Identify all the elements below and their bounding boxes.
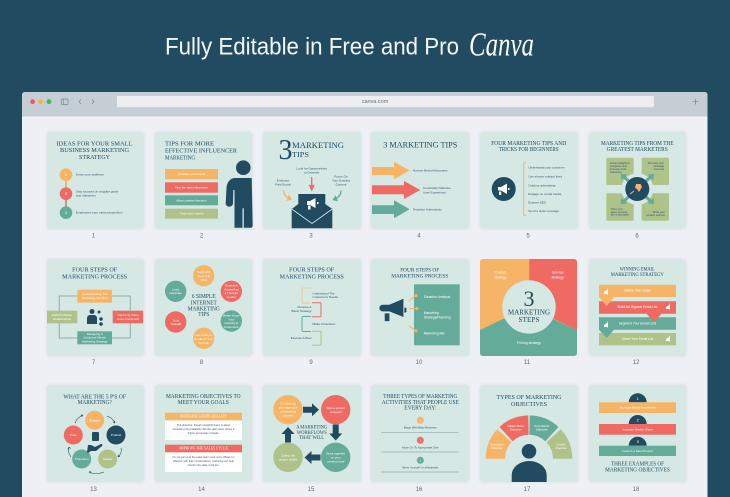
ribbons: Clean Your Email List <box>622 337 653 341</box>
tip labels: Your Existing <box>332 179 350 183</box>
tip labels: Focus On <box>334 175 348 179</box>
panel: template 8: 8 <box>200 360 204 366</box>
tip circles: Leader <box>227 295 236 299</box>
center circle: MARKETING <box>508 308 551 316</box>
bracket <box>524 162 526 216</box>
ribbons <box>599 285 676 345</box>
title: TRICKS FOR BEGINNERS <box>499 147 559 153</box>
title <box>391 267 448 280</box>
arc segments: Growth <box>556 442 566 446</box>
title: WORKFLOWS <box>297 430 327 436</box>
workflow circles: process <box>283 414 294 418</box>
step boxes: Marketing-mix (4C) <box>82 296 107 300</box>
title: MARKETING PROCESS <box>280 275 344 281</box>
workflow circles: Sign a project <box>327 406 345 410</box>
tip labels: User Experience <box>423 190 446 194</box>
title <box>166 394 241 406</box>
step boxes: Relationships <box>53 317 72 321</box>
title: 6 SIMPLE <box>192 294 216 300</box>
red wedge <box>529 259 577 330</box>
title <box>278 135 344 166</box>
panel: template 18 <box>589 385 686 493</box>
goal card two: It's not just up to the sales team to be more efficient or <box>172 455 235 459</box>
title: MEET YOUR GOALS <box>178 400 229 406</box>
title: 3 <box>278 135 292 166</box>
goal card two <box>165 445 242 472</box>
title <box>601 141 674 153</box>
step labels: Understand The <box>312 292 335 296</box>
panel: template 14: 14 <box>198 487 205 493</box>
step boxes: Marketing Strategy <box>82 339 108 343</box>
numbered steps: Know your audience <box>76 173 104 177</box>
arc segments: Objective <box>536 428 548 432</box>
tip circles: Generate <box>169 291 182 295</box>
wedge labels: Service <box>552 271 564 275</box>
icon: envelope with megaphone <box>292 194 332 228</box>
panel: template 1: 1 <box>92 234 96 240</box>
box text: message <box>653 165 665 168</box>
green panel: Situation Analysis <box>424 295 451 299</box>
panel: template 12 <box>589 259 686 366</box>
tip circles <box>165 265 242 349</box>
arrow: green <box>372 200 410 218</box>
workflow circles <box>273 395 350 472</box>
tip labels: Nurture Brand Advocates <box>413 169 448 173</box>
box text: Write your <box>653 210 665 214</box>
numbered steps: Stay focused on singular goals <box>76 190 119 194</box>
five P circles: People <box>103 457 113 461</box>
tips list: Understand your customer <box>528 166 565 170</box>
goal card one: INCREASE LEADS QUALITY <box>180 414 227 418</box>
tips list <box>528 166 565 213</box>
tip circles: Mind <box>200 278 207 282</box>
goal card one: The objective, though straightforward, is about <box>177 423 230 427</box>
center circle <box>502 280 556 334</box>
icon: marketer with gears <box>87 309 103 326</box>
title: INTERNET <box>191 300 217 306</box>
step boxes: Build Profitable <box>52 313 72 317</box>
stacked bars: 1 <box>637 396 640 401</box>
step boxes <box>47 290 143 344</box>
workflow circles: onboarding <box>280 410 296 414</box>
green panel: Strategy/Planning <box>424 316 451 320</box>
center circle: 3 <box>524 286 534 311</box>
panel: template 17 <box>480 385 578 493</box>
ribbons: Define Your Goals <box>624 289 651 293</box>
stacked bars: Launch a New Product <box>623 449 653 453</box>
title <box>63 394 127 406</box>
wedge labels: strategy <box>551 276 564 280</box>
cycle arrows <box>68 415 121 474</box>
arrows <box>284 177 341 200</box>
goal card two: shorten the sales cycle too. <box>188 463 219 467</box>
title <box>296 425 327 441</box>
tip circles: Website <box>198 341 209 345</box>
five P circles: Position <box>89 418 100 422</box>
title: TIPS <box>198 312 209 318</box>
step boxes: From Customers <box>117 317 140 321</box>
numbered steps <box>60 168 123 219</box>
title: MARKETING? <box>78 400 112 406</box>
panel: template 10 <box>371 259 469 366</box>
title <box>188 294 220 318</box>
panel: template 7: 7 <box>92 360 96 366</box>
tip circles: Guide on Your <box>194 337 213 341</box>
activity list: Move Yourself On Wholesale <box>402 466 439 470</box>
title: THREE TYPES OF MARKETING <box>383 394 458 400</box>
five P circles: Promotion <box>75 457 89 461</box>
step labels: Customer's Needs <box>312 295 338 299</box>
title <box>62 268 127 281</box>
title: EFFECTIVE INFLUENCER <box>165 148 237 154</box>
title: FOUR STEPS OF <box>400 267 439 273</box>
box text: promote word- <box>610 167 627 171</box>
panel: template 2: 2 <box>200 234 204 240</box>
icon: person <box>512 444 547 482</box>
title: MARKETING PROCESS <box>62 275 127 281</box>
wedge labels: strategy <box>494 276 507 280</box>
numbered steps: and objectives <box>76 194 96 198</box>
heading: Fully Editable in Free and Pro Canva: Fully Editable in Free and Pro <box>165 34 459 60</box>
tip labels: Content <box>336 183 347 187</box>
address bar <box>117 96 654 107</box>
panel: template 12: 12 <box>633 360 640 366</box>
activity list: 1 <box>419 418 421 422</box>
tip circles: Lead <box>172 288 179 292</box>
tip boxes <box>606 158 669 221</box>
tip circles: Better Know <box>223 314 240 318</box>
panel: template 11 <box>480 259 577 366</box>
title: MARKETING OBJECTIVES <box>605 468 670 474</box>
title: OBJECTIVES <box>511 401 547 408</box>
panel: template 15 <box>263 385 361 493</box>
title: A MARKETING <box>296 425 327 431</box>
step boxes: Designing A <box>87 332 103 336</box>
tips list: Outdoor advertising <box>528 183 556 187</box>
tip labels: to Diversify <box>304 171 320 175</box>
box text: Train your <box>611 207 623 211</box>
tip labels: Embrace <box>277 179 289 183</box>
title: WINNING EMAIL <box>620 268 655 272</box>
tips list: Use shorter subject lines <box>528 175 563 179</box>
tip labels: Paid Social <box>275 182 291 186</box>
tip labels <box>413 169 451 212</box>
tip labels: Prioritise Authenticity <box>413 208 442 212</box>
step labels <box>291 292 338 340</box>
tip circles: Industry & <box>225 321 238 325</box>
list bars: Track your metrics <box>179 212 204 216</box>
icon: megaphone circle <box>492 177 516 201</box>
box text: Create delighted <box>610 161 630 165</box>
wedge labels: Product <box>494 271 506 275</box>
box text <box>610 161 665 217</box>
panel: template 16 <box>371 385 469 493</box>
title: 3 MARKETING TIPS <box>383 140 457 150</box>
panel: template 14 <box>155 385 252 493</box>
title: THREE EXAMPLES OF <box>611 461 665 467</box>
stacked bars: Increase Market Share <box>623 427 653 431</box>
numbered steps: 1 <box>65 172 68 177</box>
panel: template 13 <box>47 385 144 493</box>
panel: template 13: 13 <box>90 487 97 493</box>
panel: template 5 <box>480 132 578 240</box>
panel: template 11: 11 <box>524 360 531 366</box>
panel: template 18: 18 <box>633 487 640 493</box>
workflow circles: your agency's <box>279 406 298 410</box>
title: BUSINESS MARKETING <box>60 148 130 154</box>
green panel: Marketing Mix <box>424 332 445 336</box>
tip circles: the end in <box>197 274 211 278</box>
green panel <box>414 284 460 345</box>
title: TYPES OF MARKETING <box>496 394 562 401</box>
panel: template 1 <box>47 132 144 240</box>
tip circles: Get to Know <box>195 333 213 337</box>
arc segments: Evaluation <box>490 442 504 446</box>
panel: template 7 <box>47 259 144 366</box>
center icon <box>625 177 649 201</box>
step labels: Make A Decision <box>312 322 336 326</box>
box text: marketing <box>610 170 622 174</box>
panel: template 17: 17 <box>524 487 531 493</box>
stepped connector <box>302 288 321 345</box>
title: MARKETING TIPS FROM THE <box>601 141 674 147</box>
workflow circles: proposal <box>330 410 342 414</box>
title: MARKETING PROCESS <box>391 274 448 280</box>
step boxes: Capturing Value <box>117 313 139 317</box>
panel: template 6 <box>589 132 686 240</box>
step labels: Execute A Plan <box>291 336 312 340</box>
panel: template 3 <box>263 132 361 240</box>
goal card one: increasing the probability that the sales team closes a <box>173 427 235 431</box>
arrows <box>621 174 654 204</box>
activity list <box>381 417 459 472</box>
panel: template 10: 10 <box>416 360 423 366</box>
box text: like a specialist <box>611 212 629 216</box>
title: IDEAS FOR YOUR SMALL <box>56 142 133 148</box>
title: WHAT ARE THE 5 P'S OF <box>63 394 127 400</box>
browser window <box>22 92 708 497</box>
title: FOUR STEPS OF <box>72 268 118 274</box>
title: THAT WILL <box>299 435 325 441</box>
activity list: Begin With Baby Business <box>404 426 437 430</box>
workflow circles: Work together <box>326 452 345 456</box>
panel: template 16: 16 <box>416 487 423 493</box>
box text: Test how your <box>647 161 664 165</box>
title: MARKETING OBJECTIVES TO <box>166 394 241 400</box>
title <box>491 141 567 153</box>
tip labels: Constantly Optimise <box>423 186 451 190</box>
icon: person <box>226 160 253 228</box>
numbered steps: 3 <box>65 210 68 215</box>
heading: Fully Editable in Free and Pro Canva <box>165 26 534 64</box>
traffic lights <box>30 99 51 104</box>
address bar: canva.com <box>362 99 389 105</box>
title: MARKETING STRATEGY <box>611 273 664 278</box>
list bars <box>165 169 218 219</box>
arc segments: Promotional <box>534 424 550 428</box>
panel: template 5: 5 <box>526 234 530 240</box>
box text: product sell text <box>646 213 665 217</box>
box text: prospects and <box>610 164 627 168</box>
panel: template 2 <box>155 132 253 240</box>
arc segments: Objective <box>510 428 522 432</box>
icon: hand with bag <box>87 432 102 453</box>
process frame <box>59 296 130 338</box>
ribbons: Segment Your Email Lists <box>619 322 657 326</box>
browser controls <box>62 99 698 104</box>
title <box>605 461 670 474</box>
step boxes: Customer-Driven <box>83 336 106 340</box>
five P circles: Price <box>70 433 77 437</box>
title <box>382 394 459 412</box>
green wedge <box>480 319 577 356</box>
box text: sales process <box>611 210 628 214</box>
center circle: STEPS <box>518 316 540 324</box>
workflow circles: Go through <box>280 402 296 406</box>
title: TIPS FOR MORE <box>165 142 214 148</box>
icon: megaphone <box>379 299 406 321</box>
title: ACTIVITIES THAT PEOPLE USE <box>382 400 459 406</box>
stacked bars: Increase Brand Awareness <box>620 406 656 410</box>
activity list: Move On To Appropriate Size <box>402 446 439 450</box>
panel: template 6: 6 <box>635 234 639 240</box>
box text: converts <box>654 167 665 171</box>
activity list: 2 <box>419 438 421 442</box>
title <box>165 142 237 162</box>
step boxes: Understanding The <box>82 292 108 296</box>
stacked bars <box>599 393 676 456</box>
connector stubs <box>409 294 418 332</box>
workflow circles: onestop brief <box>327 460 345 464</box>
tip circles: Establish <box>225 284 238 288</box>
stacked bars: 3 <box>637 439 640 444</box>
title <box>56 142 133 161</box>
panel: template 4: 4 <box>417 234 421 240</box>
title: STRATEGY <box>79 155 111 161</box>
tip circles: Customers <box>224 325 239 329</box>
title: TIPS <box>292 150 309 159</box>
tip circles: a Thought <box>225 291 238 295</box>
tip labels <box>275 167 350 187</box>
title <box>496 394 562 408</box>
wedge labels: Pricing strategy <box>517 341 541 345</box>
goal card one <box>165 413 242 440</box>
list bars: Find the right influencers <box>175 186 208 190</box>
five P circles: Product <box>111 433 121 437</box>
arc segments: Objective <box>555 446 567 450</box>
heading: Fully Editable in Free and Pro Canva: Canva <box>469 26 534 64</box>
tip circles: Begin with <box>197 270 211 274</box>
title: GREATEST MARKETERS <box>607 147 668 153</box>
title: EVERY DAY: <box>404 406 437 412</box>
goal card one: higher percentage of deals. <box>188 431 219 435</box>
tips list: Send a clear message <box>528 209 559 213</box>
activity list: 3 <box>419 458 421 462</box>
workflow arrows <box>282 403 342 464</box>
tip labels: Look for Opportunities <box>296 167 327 171</box>
panel: template 8 <box>155 259 252 366</box>
tip circles: Your <box>228 317 234 321</box>
panel: template 3: 3 <box>309 234 313 240</box>
panel: template 9 <box>263 259 361 366</box>
arc segments: Objective <box>491 446 503 450</box>
tip circles: Yourself <box>170 322 181 326</box>
green panel: Marketing <box>424 311 439 315</box>
arc segments: Market Share <box>507 424 525 428</box>
tips list: Explore SEO <box>528 200 547 204</box>
tip circles: Yourself as <box>224 287 239 291</box>
title <box>280 268 344 281</box>
numbered steps: 2 <box>65 191 68 196</box>
workflow circles: on your <box>331 456 341 460</box>
title: MARKETING <box>165 156 196 162</box>
title: FOUR STEPS OF <box>289 268 335 274</box>
title: MARKETING <box>292 141 344 150</box>
list bars: Allow creative freedom <box>176 198 207 202</box>
panel: template 9: 9 <box>309 360 313 366</box>
stacked bars: 2 <box>637 418 640 422</box>
list bars: Consider your brand <box>178 172 205 176</box>
ribbons: Build An Organic Email List <box>618 305 657 309</box>
arrow: orange <box>372 162 410 179</box>
title: FOUR MARKETING TIPS AND <box>491 141 567 147</box>
title: MARKETING <box>188 306 220 312</box>
tip circles: Trust <box>172 318 179 322</box>
step labels: Basic Strategy <box>292 309 312 313</box>
goal card two: effective with their conversations, marketing can help <box>173 459 234 463</box>
arc segments <box>486 415 572 459</box>
panel: template 4 <box>371 132 469 240</box>
title <box>611 268 664 278</box>
panel: template 15: 15 <box>308 487 315 493</box>
wedge labels <box>494 271 564 345</box>
step labels: Develop A <box>297 305 312 309</box>
tips list: Engage on social media <box>528 192 562 196</box>
goal card two: IMPROVE THE SALES CYCLE <box>179 446 229 450</box>
workflow circles: project details <box>279 458 298 462</box>
five P circles <box>64 411 126 468</box>
workflow circles: Collect the <box>281 454 295 458</box>
arrow: red <box>372 181 420 199</box>
numbered steps: Emphasize your value proposition <box>76 211 123 215</box>
